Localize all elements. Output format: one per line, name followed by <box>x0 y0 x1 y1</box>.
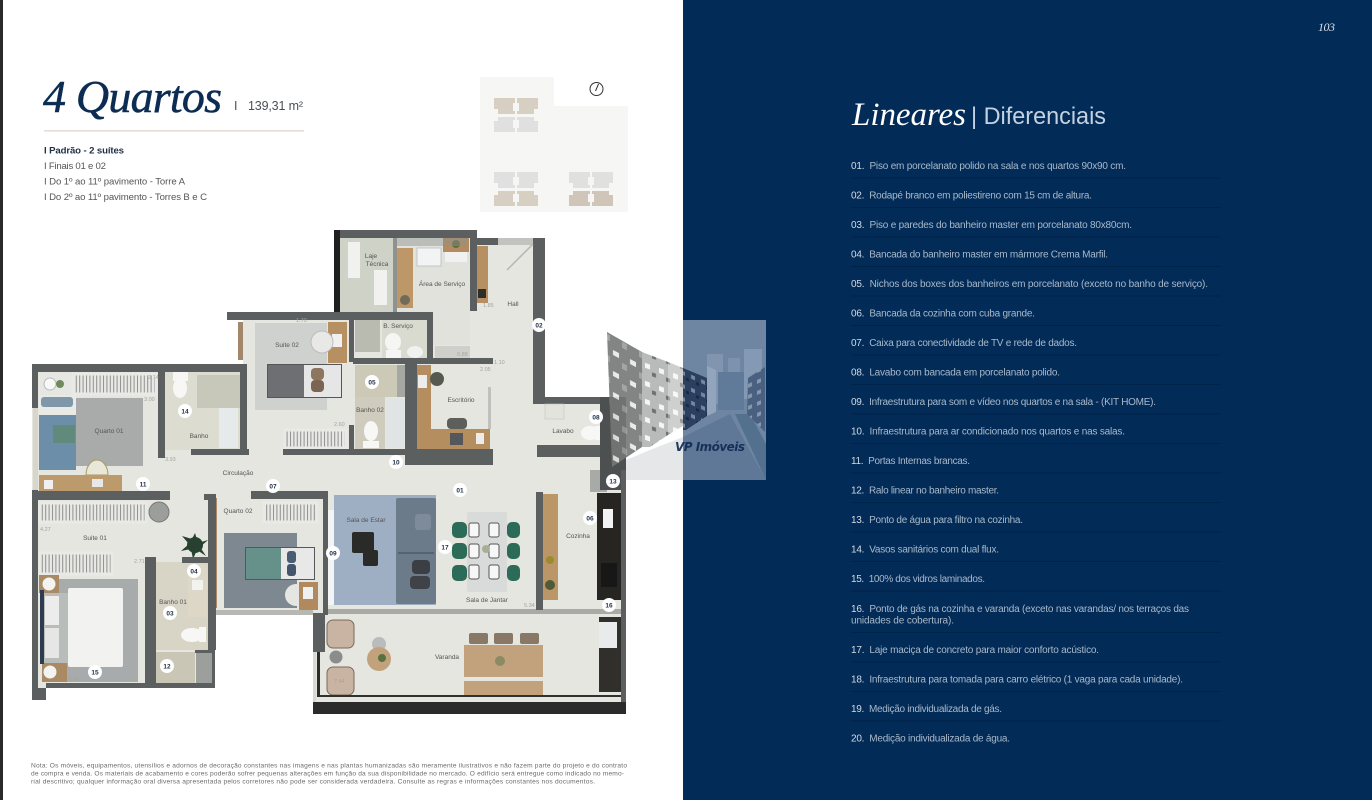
icon: north compass <box>590 82 603 96</box>
dimension labels: 4.27 <box>40 527 51 533</box>
room labels: Quarto 02 <box>224 508 253 515</box>
area: 139,31 m²: 139,31 m² <box>248 99 303 113</box>
building label: VP Imóveis <box>675 440 745 454</box>
banho 01 <box>152 562 214 683</box>
room labels: Suite 02 <box>275 342 299 349</box>
cozinha <box>543 470 621 600</box>
floor slab <box>32 231 626 714</box>
tower B units <box>494 172 538 206</box>
room labels: Laje <box>365 253 378 260</box>
numbered markers: 08 <box>592 414 600 422</box>
room labels: Cozinha <box>566 533 590 540</box>
disclaimer note <box>31 762 627 786</box>
quarto 01 <box>33 374 156 493</box>
dimension labels: 3.00 <box>144 397 155 403</box>
differentials list: 18. Infraestrutura para tomada para carro elétrico (1 vaga para cada unidade). <box>851 674 1183 686</box>
suite 02 <box>238 322 347 410</box>
dimension labels: 2.05 <box>480 367 491 373</box>
skyline <box>707 349 762 410</box>
numbered markers: 02 <box>535 322 543 330</box>
dimension labels: 2.71 <box>134 559 145 565</box>
room labels: Banho 01 <box>159 599 187 606</box>
room labels: Lavabo <box>552 428 574 435</box>
dimension labels: 2.60 <box>334 422 345 428</box>
differentials list: 03. Piso e paredes do banheiro master em porcelanato 80x80cm. <box>851 220 1132 231</box>
dimension labels: 2.60 <box>68 677 79 683</box>
differentials list: 08. Lavabo com bancada em porcelanato polido. <box>851 368 1060 378</box>
dimension labels: 5.34 <box>524 603 535 609</box>
differentials list: 19. Medição individualizada de gás. <box>851 704 1002 715</box>
numbered markers: 01 <box>456 488 464 494</box>
sala de jantar <box>452 512 520 592</box>
tower C units <box>569 172 613 206</box>
differentials list: 11. Portas Internas brancas. <box>851 456 970 467</box>
varanda <box>313 609 626 714</box>
dimension labels: 1.85 <box>483 303 494 309</box>
differentials list: 04. Bancada do banheiro master em mármore Crema Marfil. <box>851 250 1108 260</box>
dimension labels <box>40 303 535 685</box>
numbered markers: 15 <box>91 670 99 676</box>
site plan key map <box>480 77 628 212</box>
numbered markers: 06 <box>586 516 594 522</box>
service zone: laje técnica and área de serviço <box>340 238 488 345</box>
page number: 103 <box>1318 20 1335 34</box>
unit details text: I Finais 01 e 02 <box>44 161 106 172</box>
dimension labels: 2.14 <box>148 375 159 381</box>
differentials list: 07. Caixa para conectividade de TV e rede de dados. <box>851 338 1077 349</box>
title: 4 Quartos: 4 Quartos <box>43 71 222 122</box>
road <box>683 414 766 480</box>
list dividers <box>851 178 1221 721</box>
differentials list: 10. Infraestrutura para ar condicionado nos quartos e nas salas. <box>851 426 1125 438</box>
heading: Lineares | Diferenciais <box>851 97 1106 133</box>
room labels: Sala de Estar <box>346 517 386 524</box>
icon: plant <box>181 533 208 559</box>
numbered markers: 13 <box>609 478 617 486</box>
watermark: VP Imóveis building collage <box>607 320 766 480</box>
numbered markers: 09 <box>329 550 337 558</box>
disclaimer note: Nota: Os móveis, equipamentos, utensílios e adornos de decoração constantes nas imagens e nas plantas humanizadas são meramente ilustrativos e não fazem parte do projeto e do contrato <box>31 762 627 770</box>
room labels: Técnica <box>366 261 389 268</box>
numbered markers: 05 <box>368 380 376 386</box>
differentials list: unidades de cobertura). <box>851 616 954 626</box>
differentials list: 17. Laje maciça de concreto para maior conforto acústico. <box>851 645 1099 656</box>
differentials list: 06. Bancada da cozinha com cuba grande. <box>851 308 1035 320</box>
differentials list: 15. 100% dos vidros laminados. <box>851 574 985 585</box>
tower A units <box>494 98 538 132</box>
dimension labels: 1.10 <box>494 360 505 366</box>
bath 14 <box>165 372 240 450</box>
room labels <box>83 253 590 661</box>
heading: Lineares | Diferenciais: | Diferenciais <box>971 103 1106 130</box>
dimension labels: 3.93 <box>165 457 176 463</box>
differentials list: 14. Vasos sanitários com dual flux. <box>851 544 999 556</box>
room labels: Hall <box>507 301 519 308</box>
escritório <box>285 365 491 449</box>
numbered markers: 12 <box>163 664 171 670</box>
bathrooms: serviço and 02 <box>355 318 470 449</box>
differentials list: 16. Ponto de gás na cozinha e varanda (exceto nas varandas/ nos terraços das <box>851 604 1189 615</box>
sala de estar <box>323 495 436 605</box>
left black edge strip <box>0 0 3 800</box>
room labels: Quarto 01 <box>95 428 124 435</box>
differentials list: 13. Ponto de água para filtro na cozinha. <box>851 515 1023 526</box>
room labels: Circulação <box>223 470 254 477</box>
left page background <box>0 0 683 800</box>
unit details text: I Do 1º ao 11º pavimento - Torre A <box>44 176 186 188</box>
numbered markers: 14 <box>181 408 189 416</box>
suite 01 <box>39 502 169 682</box>
room labels: Varanda <box>435 654 459 661</box>
differentials list: 02. Rodapé branco em poliestireno com 15 cm de altura. <box>851 190 1092 202</box>
disclaimer note: rial descritivo; qualquer informação oral diversa apresentada pelos corretores não pode ser considerada verdadeira. Consulte as regras e informações constantes nos documentos. <box>31 778 595 786</box>
numbered markers <box>88 318 620 679</box>
dimension labels: 7.44 <box>334 679 345 685</box>
differentials list: 12. Ralo linear no banheiro master. <box>851 486 999 496</box>
differentials list: 09. Infraestrutura para som e vídeo nos quartos e na sala - (KIT HOME). <box>851 397 1156 408</box>
numbered markers: 16 <box>605 602 613 610</box>
unit details text <box>44 146 207 203</box>
building facade, right <box>747 367 765 432</box>
heading: Lineares | Diferenciais: Lineares <box>851 97 966 133</box>
room labels: B. Serviço <box>383 323 413 330</box>
hall door swing <box>507 244 533 270</box>
right navy panel <box>683 0 1372 800</box>
disclaimer note: de compra e venda. Os materiais de acabamento e cores poderão sofrer pequenas alterações em função da sua disponibilidade no mercado. O edifício será entregue como indicado no memo- <box>31 770 624 778</box>
quarto 02 <box>213 498 318 615</box>
numbered markers: 11 <box>140 482 147 488</box>
numbered markers: 17 <box>441 544 449 552</box>
watermark backdrop <box>683 320 766 480</box>
numbered markers: 07 <box>269 484 277 490</box>
building facades, left <box>607 332 642 467</box>
title underline <box>44 130 304 132</box>
numbered markers: 03 <box>166 610 174 618</box>
unit details text: I Do 2º ao 11º pavimento - Torres B e C <box>44 192 207 203</box>
unit details text: I Padrão - 2 suítes <box>44 146 124 156</box>
differentials list: 20. Medição individualizada de água. <box>851 734 1010 744</box>
room labels: Escritório <box>447 397 475 404</box>
room labels: Sala de Jantar <box>466 597 509 604</box>
area: 139,31 m²: I <box>234 99 237 113</box>
differentials list: 01. Piso em porcelanato polido na sala e nos quartos 90x90 cm. <box>851 161 1126 172</box>
left ground <box>626 437 683 480</box>
differentials list <box>851 161 1208 744</box>
room labels: Suite 01 <box>83 535 107 542</box>
floor plan <box>32 230 626 714</box>
dimension labels: 1.70 <box>296 318 307 324</box>
structural walls <box>32 230 626 702</box>
dimension labels: 0.89 <box>457 352 468 358</box>
room labels: Banho 02 <box>356 407 384 414</box>
room labels: Área de Serviço <box>419 279 466 288</box>
room labels: Banho <box>190 433 209 440</box>
numbered markers: 04 <box>190 568 198 576</box>
numbered markers: 10 <box>392 460 400 466</box>
lavabo fixtures <box>545 404 600 440</box>
differentials list: 05. Nichos dos boxes dos banheiros em porcelanato (exceto no banho de serviço). <box>851 279 1208 290</box>
